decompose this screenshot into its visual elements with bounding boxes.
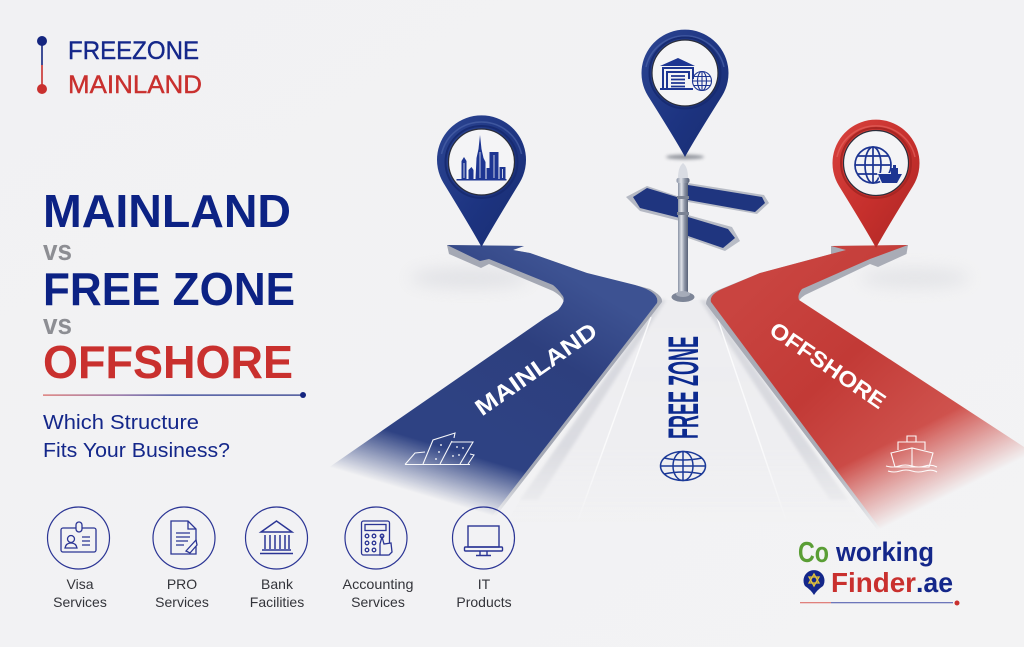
logo: coworking finder: Finder <box>831 567 916 598</box>
icon: warehouse and globe <box>660 58 712 90</box>
icon: ship outline <box>886 436 937 472</box>
service: bank <box>246 507 308 610</box>
title: FREE ZONE <box>43 263 295 315</box>
icon: calculator and hand <box>362 521 392 555</box>
title: OFFSHORE <box>43 336 293 388</box>
subtitle <box>43 411 230 462</box>
text: FREE ZONE <box>660 336 708 439</box>
pin: free zone warehouse <box>642 30 728 157</box>
service: visa: Services <box>53 594 107 610</box>
service: accounting <box>342 507 414 610</box>
arrow path: mainland <box>332 245 662 514</box>
subtitle: Fits Your Business? <box>43 439 230 462</box>
icon: free zone globe <box>660 452 706 480</box>
service: bank: Bank <box>261 576 294 592</box>
logo: coworking finder: working <box>835 537 934 567</box>
service: accounting: Accounting <box>342 576 414 592</box>
service: pro: PRO <box>167 576 197 592</box>
title: vs <box>43 309 72 341</box>
icon: buildings outline <box>405 433 474 464</box>
logo: coworking finder: Co <box>798 537 829 569</box>
icon: logo pin with star <box>804 570 824 595</box>
center road: free zone lane <box>524 299 844 498</box>
offshore road label: OFFSHORE <box>765 317 890 414</box>
icon: city skyline <box>456 135 506 180</box>
icon: document with pen <box>171 521 197 554</box>
logo: coworking finder <box>798 537 960 606</box>
logo: coworking finder: .ae <box>916 567 953 598</box>
service: pro: Services <box>155 594 209 610</box>
pin shadow: free zone <box>666 154 704 160</box>
sign: upper right arrow <box>688 183 769 214</box>
service: visa <box>48 507 110 610</box>
arrow path: offshore <box>706 245 1024 526</box>
icon: laptop monitor <box>464 526 502 556</box>
legend: freezone / mainland <box>37 36 202 99</box>
mainland road label: MAINLAND <box>470 317 602 421</box>
legend: freezone / mainland: FREEZONE <box>68 37 199 65</box>
title: MAINLAND <box>43 185 291 237</box>
icon: id badge <box>61 522 96 552</box>
title rule <box>43 392 306 398</box>
sign: left arrow <box>626 186 680 221</box>
pin: offshore globe ship <box>832 120 920 248</box>
title: vs <box>43 235 72 267</box>
service: accounting: Services <box>351 594 405 610</box>
pin: mainland city <box>437 115 526 247</box>
sign: lower right arrow <box>688 215 740 251</box>
subtitle: Which Structure <box>43 411 199 434</box>
signpost <box>626 163 769 302</box>
legend: freezone / mainland: MAINLAND <box>68 71 202 99</box>
icon: bank building <box>260 521 293 554</box>
service: pro <box>153 507 215 610</box>
service: it: IT <box>478 576 491 592</box>
service: it: Products <box>456 594 512 610</box>
icon: globe and ship <box>855 147 903 184</box>
service: bank: Facilities <box>250 594 304 610</box>
service: it <box>452 507 514 610</box>
pole <box>678 178 688 294</box>
title <box>43 185 295 388</box>
service: visa: Visa <box>67 576 94 592</box>
